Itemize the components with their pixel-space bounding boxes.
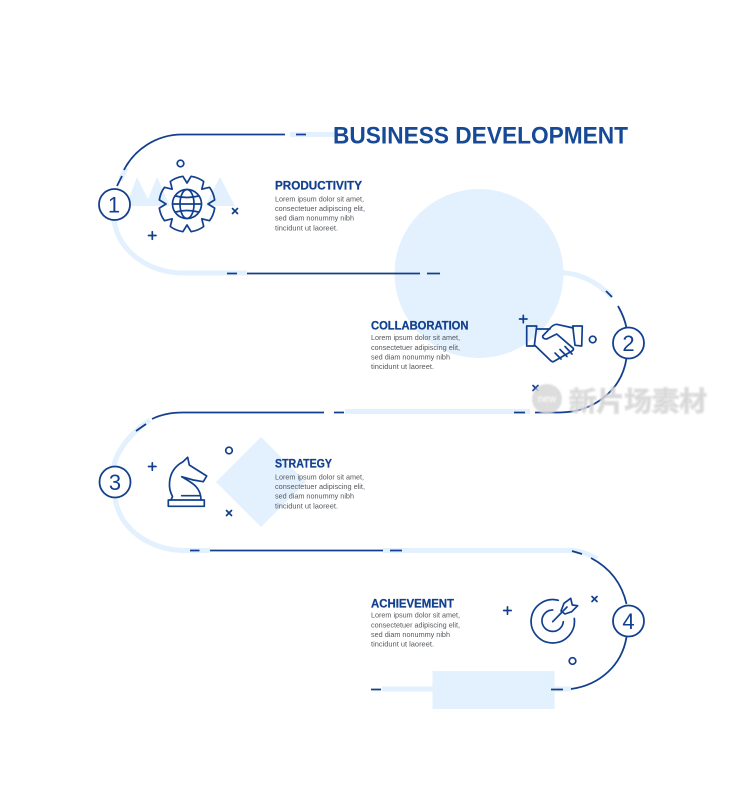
text block: strategy: Lorem ipsum dolor sit amet, (275, 472, 364, 482)
number badge 3: 3 (109, 470, 121, 495)
watermark: 新片场素材 (569, 387, 707, 417)
text block: achievement: consectetuer adipiscing elit, (371, 620, 460, 630)
text block: achievement (371, 610, 460, 648)
title: BUSINESS DEVELOPMENT (333, 122, 628, 150)
icon: cross (232, 208, 238, 214)
icon: small circle (226, 447, 232, 454)
heading: collaboration: COLLABORATION (371, 320, 468, 332)
text block: collaboration: sed diam nonummy nibh (371, 352, 450, 362)
number badge 2: 2 (622, 331, 635, 356)
icon: gear with globe (159, 176, 215, 232)
background shape: circle (394, 189, 564, 358)
step 2 (371, 315, 644, 390)
heading: achievement: ACHIEVEMENT (371, 598, 454, 610)
number badge 3 (100, 466, 130, 498)
text block: productivity: tincidunt ut laoreet. (275, 224, 338, 232)
text block: strategy: tincidunt ut laoreet. (275, 502, 338, 510)
heading: strategy: STRATEGY (275, 458, 332, 470)
background shape: rectangle (432, 671, 554, 709)
text block: productivity: sed diam nonummy nibh (275, 214, 354, 222)
icon: cross (592, 596, 597, 602)
background shape: triangles (126, 177, 235, 206)
icon: cross (533, 386, 538, 390)
icon: plus (148, 232, 156, 239)
text block: productivity: consectetuer adipiscing elit, (275, 204, 365, 213)
text block: strategy: sed diam nonummy nibh (275, 492, 354, 500)
number badge 1 (99, 189, 130, 220)
text block: collaboration: Lorem ipsum dolor sit amet, (371, 333, 460, 342)
step 4 (371, 596, 644, 664)
number badge 4: 4 (622, 609, 635, 634)
icon: plus (520, 315, 527, 323)
heading: productivity: PRODUCTIVITY (275, 180, 362, 192)
icon: plus (148, 463, 156, 470)
text block: strategy (275, 472, 365, 510)
step 1 (99, 160, 365, 239)
number badge 2 (613, 328, 644, 358)
background shape: diamond (216, 437, 306, 527)
step 3 (100, 447, 365, 516)
watermark: new (538, 394, 557, 405)
icon: cross (226, 510, 232, 516)
text block: strategy: consectetuer adipiscing elit, (275, 482, 365, 491)
icon: small circle (177, 160, 184, 167)
number badge 1: 1 (108, 192, 120, 218)
icon: small circle (569, 658, 576, 664)
text block: collaboration: tincidunt ut laoreet. (371, 362, 434, 371)
text block: productivity (275, 194, 365, 232)
text block: productivity: Lorem ipsum dolor sit amet, (275, 194, 364, 204)
text block: collaboration (371, 333, 460, 371)
number badge 4 (613, 606, 644, 636)
icon: small circle (589, 336, 596, 343)
icon: plus (504, 607, 511, 614)
text block: achievement: sed diam nonummy nibh (371, 630, 450, 639)
winding path (114, 134, 626, 690)
text block: achievement: tincidunt ut laoreet. (371, 640, 434, 648)
text block: achievement: Lorem ipsum dolor sit amet, (371, 610, 460, 620)
icon: handshake (527, 324, 582, 362)
icon: chess knight (168, 457, 207, 506)
text block: collaboration: consectetuer adipiscing elit, (371, 343, 460, 352)
icon: target with arrow (531, 598, 578, 643)
